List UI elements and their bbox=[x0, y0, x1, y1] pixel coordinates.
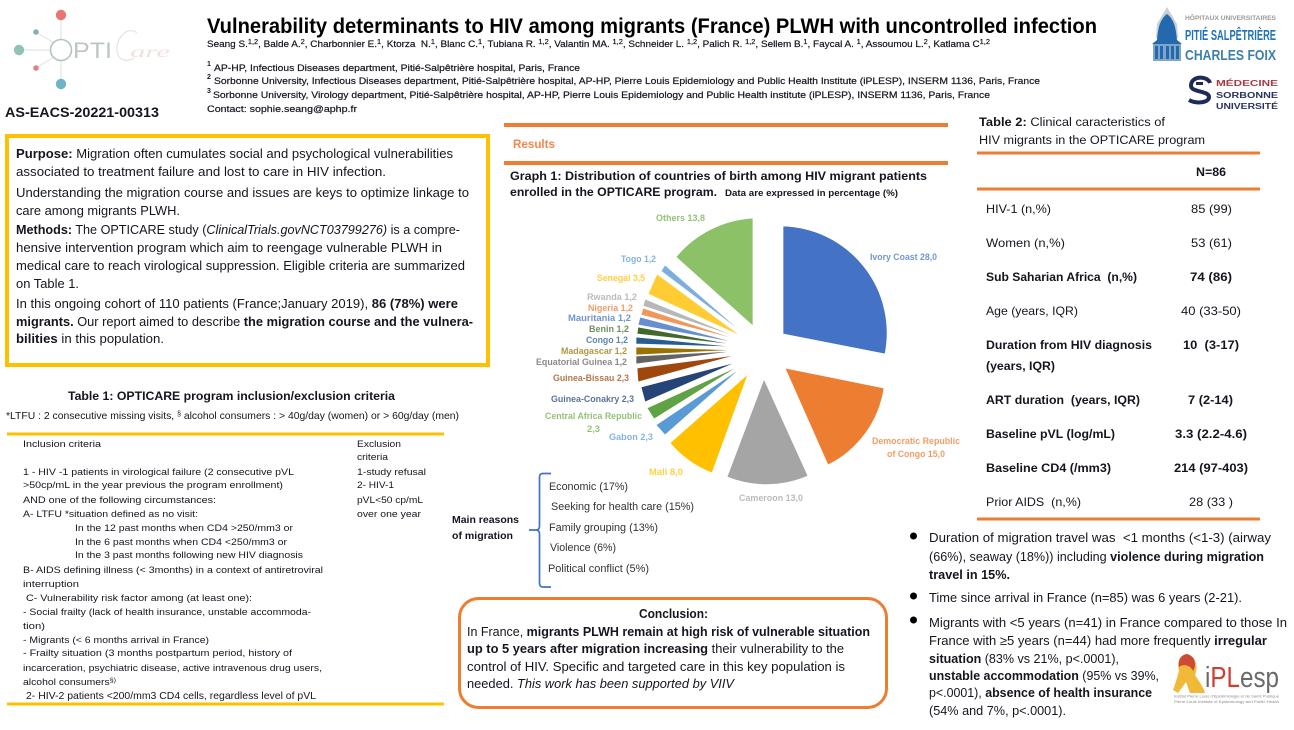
pie labels bbox=[536, 213, 960, 503]
affiliations: Contact: sophie.seang@aphp.fr bbox=[207, 103, 357, 114]
pie labels: Gabon 2,3 bbox=[609, 432, 653, 442]
pie labels: Ivory Coast 28,0 bbox=[870, 252, 937, 262]
bullet list: migration findings: France with ≥5 years (n=44) had more frequently irregular bbox=[929, 634, 1267, 648]
logo: iPLesp bbox=[1173, 654, 1279, 704]
exclusion criteria column bbox=[357, 439, 426, 520]
inclusion criteria column: 1 - HIV -1 patients in virological failure (2 consecutive pVL bbox=[23, 467, 295, 478]
logo: iPLesp: iPLesp bbox=[1205, 662, 1279, 694]
table 1 footnote: § bbox=[177, 411, 181, 418]
inclusion criteria column: tion) bbox=[23, 621, 45, 632]
authors: 1,2 bbox=[980, 39, 990, 46]
panel: conclusion: In France, migrants PLWH remain at high risk of vulnerable situation bbox=[467, 625, 870, 639]
row values: 214 (97-403) bbox=[1174, 461, 1248, 475]
inclusion criteria column: >50cp/mL in the year previous the program enrollment) bbox=[23, 480, 283, 491]
row values: 10 (3-17) bbox=[1183, 338, 1239, 352]
inclusion criteria column: Inclusion criteria bbox=[23, 439, 102, 450]
inclusion criteria column: B- AIDS defining illness (< 3months) in a context of antiretroviral bbox=[23, 565, 323, 576]
authors: , Valantin MA. bbox=[549, 38, 613, 49]
panel: purpose and methods: Purpose: Migration often cumulates social and psychological vulnerabilities bbox=[16, 147, 453, 161]
panel: purpose and methods: bilities in this population. bbox=[16, 332, 164, 346]
row labels: Prior AIDS (n,%) bbox=[986, 495, 1081, 509]
exclusion criteria column: Exclusion bbox=[357, 439, 401, 450]
row labels: (years, IQR) bbox=[986, 359, 1055, 373]
table 2: clinical characteristics bbox=[977, 152, 1260, 520]
reasons list bbox=[548, 481, 694, 575]
authors: 1,2 bbox=[538, 39, 549, 46]
authors: , Tubiana R. bbox=[482, 38, 538, 49]
inclusion criteria column: In the 6 past months when CD4 <250/mm3 or bbox=[75, 537, 288, 548]
authors: 2 bbox=[924, 39, 928, 46]
logo: Pitié Salpêtrière Charles Foix bbox=[1152, 7, 1276, 64]
authors: , Balde A. bbox=[258, 38, 301, 49]
row values: 28 (33 ) bbox=[1189, 495, 1233, 509]
inclusion criteria column: interruption bbox=[23, 579, 79, 590]
panel: purpose and methods: Understanding the migration course and issues are keys to optimize linkage to bbox=[16, 186, 469, 200]
heading: graph 1: Graph 1: Distribution of countries of birth among HIV migrant patients bbox=[510, 169, 927, 183]
heading: graph 1 bbox=[510, 169, 927, 199]
reasons label: Main reasons bbox=[452, 515, 519, 526]
heading: graph 1: Data are expressed in percentage (%) bbox=[725, 188, 898, 198]
inclusion criteria column: - Social frailty (lack of health insurance, unstable accommoda- bbox=[23, 607, 311, 618]
exclusion criteria column: over one year bbox=[357, 509, 422, 520]
pie labels: Madagascar 1,2 bbox=[561, 346, 627, 356]
row labels bbox=[986, 202, 1152, 509]
logo: OptiCare: PTI bbox=[73, 38, 112, 63]
pie labels: Equatorial Guinea 1,2 bbox=[536, 357, 627, 367]
row values: 7 (2-14) bbox=[1188, 393, 1233, 407]
panel: purpose and methods: medical care to reach virological suppression. Eligible criteria are summarized bbox=[16, 259, 465, 273]
bullet list: migration findings bbox=[910, 531, 1287, 718]
bracket bbox=[529, 474, 551, 587]
authors: , Faycal A. bbox=[808, 38, 857, 49]
results header: Results bbox=[513, 137, 555, 151]
pie labels: Democratic Republic bbox=[872, 436, 960, 446]
logo: Pitié Salpêtrière Charles Foix: HÔPITAUX UNIVERSITAIRES bbox=[1185, 14, 1276, 22]
row values: 85 (99) bbox=[1191, 202, 1232, 216]
pie slices bbox=[636, 218, 887, 485]
pie labels: Mali 8,0 bbox=[649, 467, 683, 477]
inclusion criteria column: In the 12 past months when CD4 >250/mm3 or bbox=[75, 523, 294, 534]
reasons list: Seeking for health care (15%) bbox=[551, 501, 694, 513]
affiliations: AP-HP, Infectious Diseases department, Pitié-Salpêtrière hospital, Paris, France bbox=[214, 62, 580, 73]
inclusion criteria column: 2- HIV-2 patients <200/mm3 CD4 cells, regardless level of pVL bbox=[26, 691, 316, 702]
authors: 1,2 bbox=[248, 39, 258, 46]
logo: iPLesp: Pierre Louis Institute of Epidemiology and Public Health bbox=[1174, 700, 1279, 704]
bullet list: migration findings: (66%), seaway (18%)) including violence during migration bbox=[929, 550, 1264, 564]
title: Vulnerability determinants to HIV among migrants (France) PLWH with uncontrolled infection bbox=[207, 15, 1097, 38]
panel: purpose and methods: hensive intervention program which aim to reengage vulnerable PLWH in bbox=[16, 241, 442, 255]
row labels: Sub Saharian Africa (n,%) bbox=[986, 270, 1137, 284]
affiliations: Sorbonne University, Infectious Diseases department, Pitié-Salpêtrière hospital, AP-HP, Pierre Louis Epidemiology and Public Health Institute (iPLESP), INSERM 1136, Paris, France bbox=[214, 75, 1040, 86]
reasons label bbox=[452, 515, 519, 542]
table 1 footnote: *LTFU : 2 consecutive missing visits, bbox=[6, 411, 174, 422]
pie labels: of Congo 15,0 bbox=[887, 449, 945, 459]
authors: 1 bbox=[857, 39, 861, 46]
exclusion criteria column: pVL<50 cp/mL bbox=[357, 495, 424, 506]
authors: , Assoumou L. bbox=[861, 38, 924, 49]
affiliations: Sorbonne University, Virology department, Pitié-Salpêtrière hospital, AP-HP, Pierre Louis Epidemiology and Public Health institute (iPLESP), INSERM 1136, Paris, France bbox=[213, 89, 990, 100]
main reasons of migration bbox=[452, 474, 694, 587]
panel: purpose and methods: care among migrants PLWH. bbox=[16, 204, 180, 218]
row values bbox=[1174, 202, 1248, 509]
logo: Médecine Sorbonne Université: UNIVERSITÉ bbox=[1216, 102, 1279, 111]
bullet list: migration findings: situation (83% vs 21%, p<.0001), bbox=[929, 652, 1119, 666]
authors: , Katlama C bbox=[928, 38, 980, 49]
table 2: clinical characteristics: N=86 bbox=[1196, 165, 1226, 179]
row labels: Women (n,%) bbox=[986, 236, 1065, 250]
row labels: Baseline pVL (log/mL) bbox=[986, 427, 1115, 441]
exclusion criteria column: 1-study refusal bbox=[357, 467, 426, 478]
row values: 74 (86) bbox=[1190, 270, 1232, 284]
panel: purpose and methods: Methods: The OPTICARE study (ClinicalTrials.govNCT03799276) is a compre- bbox=[16, 223, 460, 237]
heading: table 2 bbox=[979, 115, 1205, 147]
panel: conclusion: up to 5 years after migration increasing their vulnerability to the bbox=[467, 642, 844, 656]
pie labels: Cameroon 13,0 bbox=[739, 493, 803, 503]
row values: 53 (61) bbox=[1191, 236, 1232, 250]
row labels: Duration from HIV diagnosis bbox=[986, 338, 1152, 352]
heading: table 2: Table 2: Clinical caracteristics of bbox=[979, 115, 1166, 129]
bullet list: migration findings: Duration of migration travel was <1 months (<1-3) (airway bbox=[929, 531, 1272, 545]
panel: purpose and methods: migrants. Our report aimed to describe the migration course and the vulnera- bbox=[16, 315, 473, 329]
row values: 40 (33-50) bbox=[1181, 304, 1241, 318]
authors: Seang S. bbox=[207, 38, 246, 49]
inclusion criteria column bbox=[23, 439, 323, 702]
authors: 1 bbox=[478, 39, 482, 46]
row labels: ART duration (years, IQR) bbox=[986, 393, 1140, 407]
inclusion criteria column: AND one of the following circumstances: bbox=[23, 495, 216, 506]
bullet list: migration findings: p<.0001), absence of health insurance bbox=[929, 686, 1152, 700]
authors: , Sellem B. bbox=[755, 38, 803, 49]
panel: purpose and methods: on Table 1. bbox=[16, 277, 79, 291]
row labels: Baseline CD4 (/mm3) bbox=[986, 461, 1111, 475]
pie labels: Guinea-Bissau 2,3 bbox=[553, 373, 629, 383]
panel: conclusion: control of HIV. Specific and targeted care in this key population is bbox=[467, 660, 845, 674]
authors: , Charbonnier E. bbox=[305, 38, 377, 49]
affiliations: 2 bbox=[207, 74, 211, 81]
table 1: inclusion and exclusion criteria bbox=[7, 432, 444, 706]
logo: Médecine Sorbonne Université: MÉDECINE bbox=[1216, 79, 1279, 88]
inclusion criteria column: In the 3 past months following new HIV diagnosis bbox=[75, 550, 303, 561]
authors: , Schneider L. bbox=[623, 38, 687, 49]
logo: Pitié Salpêtrière Charles Foix: CHARLES FOIX bbox=[1185, 47, 1276, 64]
inclusion criteria column: A- LTFU *situation defined as no visit: bbox=[23, 509, 198, 520]
panel: conclusion: Conclusion: bbox=[639, 607, 708, 621]
results header bbox=[504, 123, 948, 165]
inclusion criteria column: - Migrants (< 6 months arrival in France) bbox=[23, 635, 209, 646]
reasons list: Economic (17%) bbox=[549, 481, 628, 493]
table 1 footnote: alcohol consumers : > 40g/day (women) or > 60g/day (men) bbox=[181, 411, 459, 422]
exclusion criteria column: 2- HIV-1 bbox=[357, 480, 394, 491]
authors: 1,2 bbox=[613, 39, 623, 46]
pie labels: Rwanda 1,2 bbox=[587, 292, 637, 302]
pie labels: Senegal 3,5 bbox=[597, 273, 645, 283]
pie labels: Togo 1,2 bbox=[621, 254, 656, 264]
logo: OptiCare bbox=[14, 10, 170, 89]
authors: 1 bbox=[431, 39, 435, 46]
authors: 1 bbox=[803, 39, 808, 46]
pie labels: Mauritania 1,2 bbox=[568, 313, 631, 323]
authors: 1,2 bbox=[687, 39, 697, 46]
pie labels: Nigeria 1,2 bbox=[588, 303, 633, 313]
pie labels: Benin 1,2 bbox=[589, 324, 629, 334]
row values: 3.3 (2.2-4.6) bbox=[1175, 427, 1247, 441]
reasons list: Family grouping (13%) bbox=[549, 522, 658, 534]
heading: table 2: HIV migrants in the OPTICARE program bbox=[979, 133, 1205, 147]
reasons list: Political conflict (5%) bbox=[548, 563, 649, 575]
panel: purpose and methods: associated to treatment failure and lost to care in HIV infection. bbox=[16, 165, 386, 179]
affiliations: 3 bbox=[207, 88, 211, 95]
affiliations bbox=[207, 61, 1040, 114]
panel: purpose and methods: In this ongoing cohort of 110 patients (France;January 2019), 86 (78%) were bbox=[16, 297, 458, 311]
panel: purpose and methods bbox=[7, 136, 488, 365]
bullet list: migration findings: Time since arrival in France (n=85) was 6 years (2-21). bbox=[929, 591, 1242, 605]
row labels: Age (years, IQR) bbox=[986, 304, 1078, 318]
inclusion criteria column: C- Vulnerability risk factor among (at least one): bbox=[26, 593, 252, 604]
heading: table 1: Table 1: OPTICARE program inclusion/exclusion criteria bbox=[68, 389, 395, 403]
pie labels: 2,3 bbox=[587, 424, 600, 434]
authors: , Blanc C. bbox=[435, 38, 478, 49]
bullet list: migration findings: travel in 15%. bbox=[929, 568, 1010, 582]
row labels: HIV-1 (n,%) bbox=[986, 202, 1051, 216]
authors: 1 bbox=[377, 39, 381, 46]
reasons label: of migration bbox=[452, 531, 513, 542]
affiliations: 1 bbox=[207, 61, 211, 68]
bullet list: migration findings: unstable accommodation (95% vs 39%, bbox=[929, 669, 1159, 683]
pie labels: Guinea-Conakry 2,3 bbox=[551, 394, 634, 404]
abstract id: AS-EACS-20221-00313 bbox=[5, 104, 159, 120]
authors: , Palich R. bbox=[697, 38, 745, 49]
pie labels: Congo 1,2 bbox=[586, 335, 628, 345]
logo: Médecine Sorbonne Université bbox=[1189, 78, 1279, 111]
exclusion criteria column: criteria bbox=[357, 452, 389, 463]
pie labels: Central Africa Republic bbox=[545, 411, 642, 421]
panel: conclusion bbox=[460, 598, 886, 708]
logo: Médecine Sorbonne Université: SORBONNE bbox=[1216, 91, 1279, 100]
bullet list: migration findings: Migrants with <5 years (n=41) in France compared to those In bbox=[929, 616, 1287, 630]
logo: iPLesp: Institut Pierre Louis d'Épidémiologie et de Santé Publique bbox=[1174, 694, 1279, 698]
authors: 1,2 bbox=[745, 39, 756, 46]
inclusion criteria column: alcohol consumers bbox=[23, 677, 103, 688]
inclusion criteria column: incarceration, psychiatric disease, active intravenous drug users, bbox=[23, 663, 322, 674]
pie chart: countries of birth bbox=[536, 213, 960, 503]
inclusion criteria column: §) bbox=[110, 677, 116, 684]
bullet list: migration findings: (54% and 7%, p<.0001). bbox=[929, 704, 1066, 718]
authors: , Ktorza N. bbox=[381, 38, 431, 49]
reasons list: Violence (6%) bbox=[550, 542, 616, 554]
pie labels: Others 13,8 bbox=[656, 213, 705, 223]
panel: conclusion: needed. This work has been supported by VIIV bbox=[467, 677, 736, 691]
heading: graph 1: enrolled in the OPTICARE program. bbox=[510, 185, 717, 199]
inclusion criteria column: - Frailty situation (3 months postpartum period, history of bbox=[23, 648, 292, 659]
authors: 2 bbox=[301, 39, 305, 46]
logo: OptiCare: are bbox=[130, 44, 170, 61]
